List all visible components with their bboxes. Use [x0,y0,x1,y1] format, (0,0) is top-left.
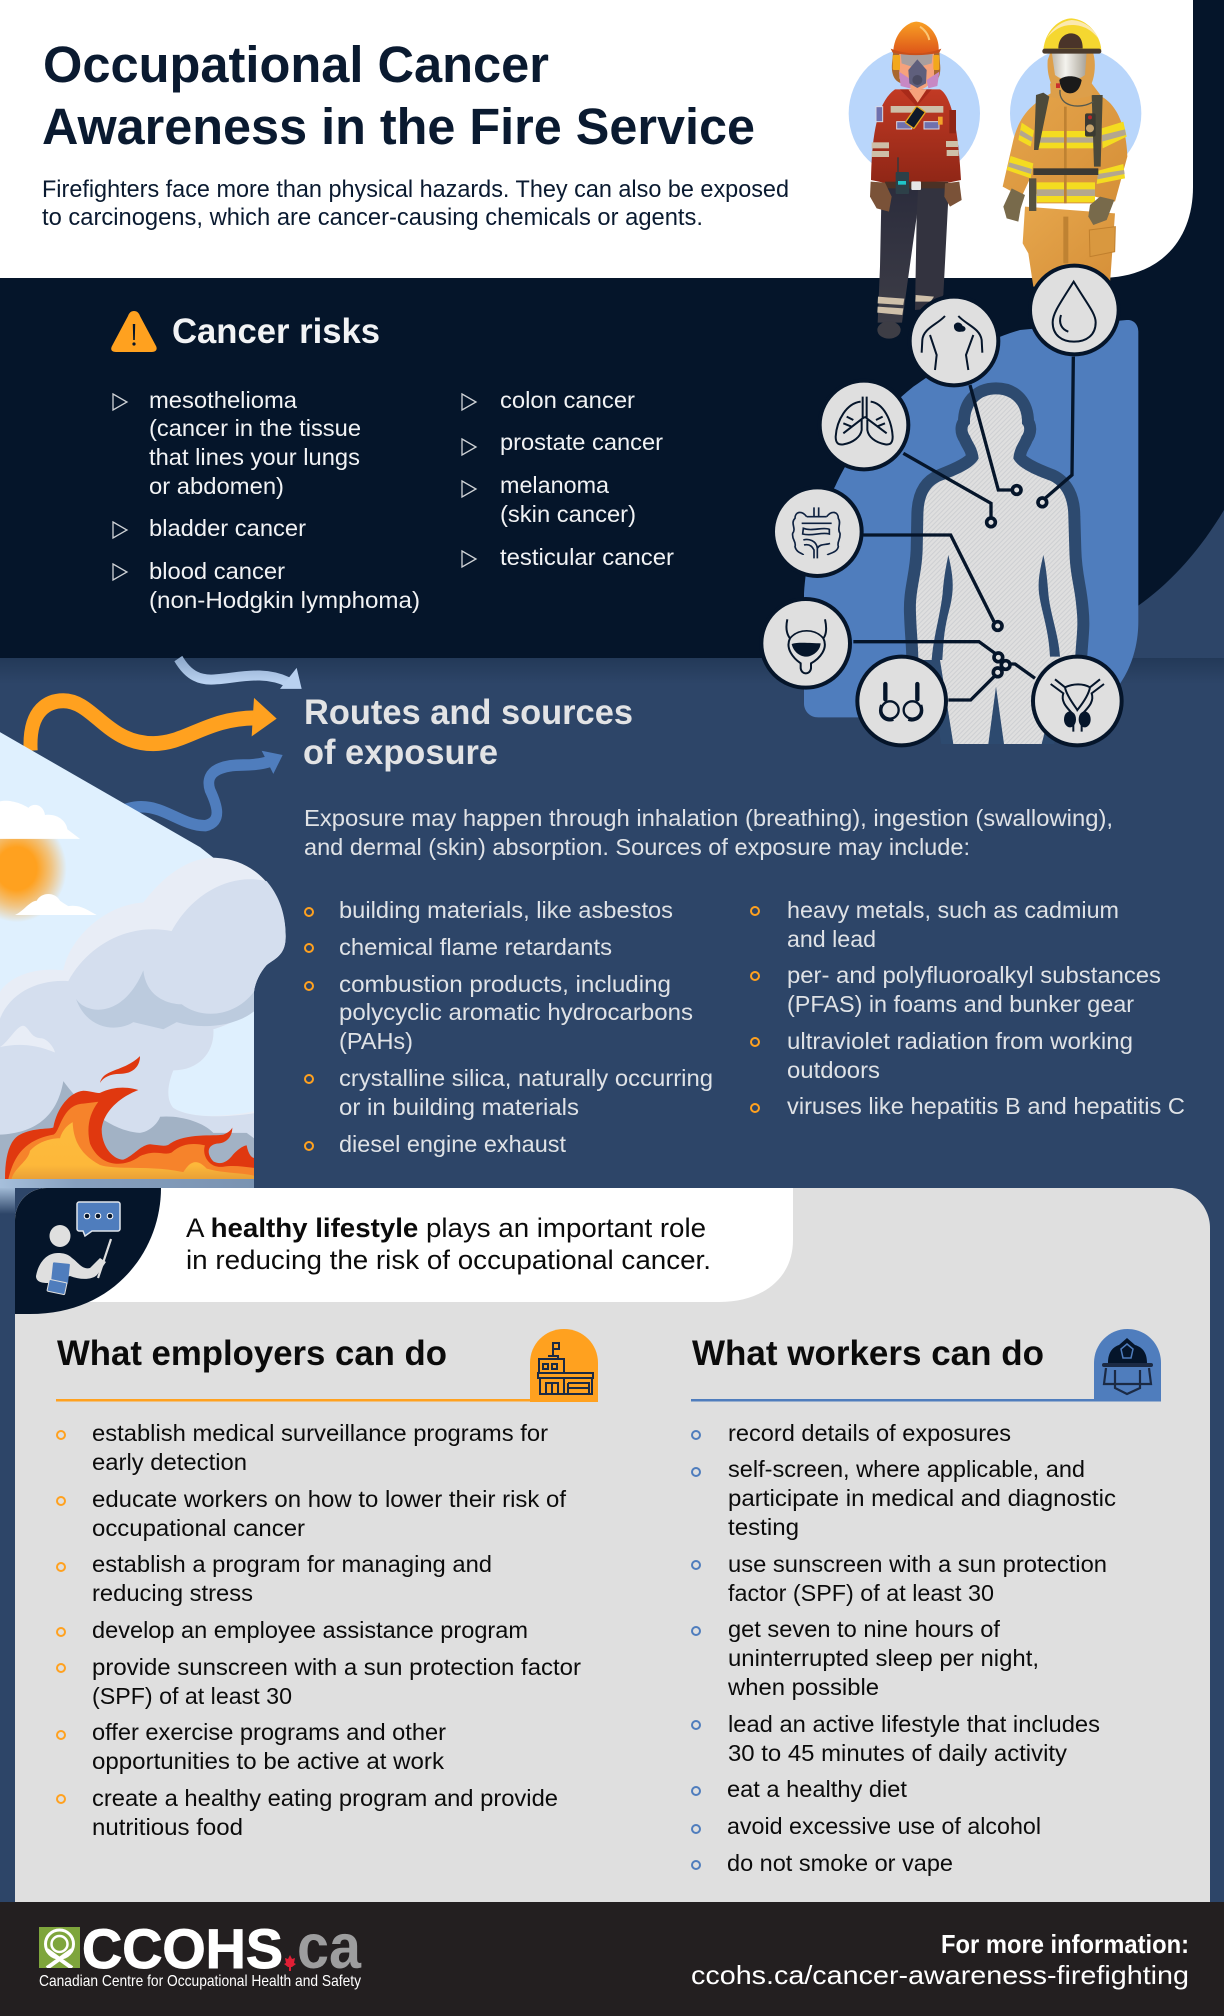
item [692,1711,1100,1766]
arrow: orange [30,698,277,751]
item: outdoors [787,1057,880,1083]
item [57,1551,492,1606]
item: diesel engine exhaust [339,1131,567,1157]
footer: more information [691,1929,1189,1990]
list: cancer risks right column [462,387,674,570]
heading: what employers can do: What employers can do [57,1334,447,1373]
panel: footer [0,1902,1224,2016]
item [57,1719,446,1774]
item: colon cancer: colon cancer [500,387,635,413]
heading: routes and sources [303,693,633,772]
icon: presenter badge [15,1188,161,1314]
item: eat a healthy diet [727,1776,908,1802]
icon: logo emblem [39,1927,80,1968]
item: building materials, like asbestos [339,897,673,923]
icon: maple leaf [284,1955,296,1971]
item: self-screen, where applicable, and [728,1456,1085,1482]
item: participate in medical and diagnostic [728,1485,1116,1511]
sky [0,732,254,1179]
speech bubble [77,1202,120,1236]
logo: CCOHS.ca: ca [297,1912,362,1982]
item: or in building materials [339,1094,579,1120]
item: factor (SPF) of at least 30 [728,1580,994,1606]
item: (PFAS) in foams and bunker gear [787,991,1134,1017]
text: exposure description [304,805,1113,860]
sun [0,811,87,926]
item [692,1616,1039,1700]
item: develop an employee assistance program [92,1617,528,1643]
list: what workers can do [692,1420,1116,1876]
arrow: blue [120,751,283,826]
item: heavy metals, such as cadmium [787,897,1119,923]
item: do not smoke or vape [727,1850,953,1876]
flames [5,1056,254,1179]
item: ultraviolet radiation from working [787,1028,1133,1054]
item: combustion products, including [339,971,671,997]
heading: cancer risks: Cancer risks [172,312,380,351]
item: polycyclic aromatic hydrocarbons [339,999,693,1025]
item [751,1028,1133,1083]
title: Awareness in the Fire Service [42,98,755,155]
item [57,1420,548,1475]
item: per- and polyfluoroalkyl substances [787,962,1161,988]
rule: workers heading line [691,1399,1161,1402]
background: shadow beneath navy band [0,658,1224,684]
item [57,1486,567,1541]
background: routes section [0,640,1224,1200]
item: establish medical surveillance programs for [92,1420,548,1446]
item [751,897,1119,952]
footer: more information: ccohs.ca/cancer-awareness-firefighting [691,1960,1189,1990]
item: occupational cancer [92,1515,305,1541]
item [305,1065,713,1120]
icon: testes [857,657,946,745]
icon: warning triangle [111,311,157,352]
item: when possible [727,1674,879,1700]
item: testing [728,1514,799,1540]
item: uninterrupted sleep per night, [728,1645,1039,1671]
item: mesothelioma [113,387,361,499]
item [751,962,1161,1017]
connector end rings [987,486,1047,677]
item: avoid excessive use of alcohol [727,1813,1041,1839]
text: exposure description: Exposure may happen through inhalation (breathing), ingestion (swallowing), [304,805,1113,831]
icon: bladder [761,599,850,688]
item [305,971,693,1054]
item: (PAHs) [339,1028,413,1054]
item: get seven to nine hours of [728,1616,1001,1642]
list: cancer risks left column [113,387,420,613]
item [57,1654,581,1709]
panel: cancer risks navy band [0,0,1224,658]
item: opportunities to be active at work [92,1748,445,1774]
item: mesothelioma: that lines your lungs [149,444,360,470]
illustration: two firefighters [849,18,1141,339]
item: blood cancer: blood cancer [149,558,285,584]
item: melanoma: melanoma [500,472,609,498]
intro text [42,176,789,231]
icon: fire station on orange arch [530,1329,598,1402]
item: provide sunscreen with a sun protection factor [92,1654,581,1680]
left edge fade beside panel [0,1188,15,1214]
panel: white healthy lifestyle banner [15,1188,793,1302]
list: what employers can do [57,1420,581,1840]
item: blood cancer: (non-Hodgkin lymphoma) [149,587,420,613]
list: exposure sources right column [751,897,1185,1119]
icon: prostate [1033,657,1122,745]
icon: firefighter helmet on blue arch [1094,1329,1161,1401]
item: bladder cancer: bladder cancer [149,515,306,541]
item: prostate cancer: prostate cancer [500,429,663,455]
illustration: arrows, sky, clouds and fire [0,659,302,1179]
icon: intestines [773,487,862,576]
item: mesothelioma: mesothelioma [149,387,297,413]
item: offer exercise programs and other [92,1719,446,1745]
intro text: Firefighters face more than physical hazards. They can also be exposed [42,176,789,203]
footer: more information: For more information: [941,1929,1189,1959]
presenter figure [36,1225,111,1295]
item: viruses like hepatitis B and hepatitis C [787,1093,1185,1119]
item: blood cancer [113,558,420,613]
item: mesothelioma: (cancer in the tissue [149,415,361,441]
item: melanoma: (skin cancer) [500,501,636,527]
item: record details of exposures [728,1420,1011,1446]
text: healthy lifestyle statement [186,1213,711,1275]
intro text: to carcinogens, which are cancer-causing chemicals or agents. [42,204,703,231]
text: healthy lifestyle statement: in reducing the risk of occupational cancer. [186,1245,711,1275]
blue circle backdrops [849,48,1141,179]
icon: blood drop [1030,266,1119,354]
title: Occupational Cancer [43,36,549,93]
item [692,1456,1116,1540]
item: crystalline silica, naturally occurring [339,1065,713,1091]
logo: CCOHS.ca [39,1927,362,1990]
item: and lead [787,926,876,952]
item: (SPF) of at least 30 [92,1683,292,1709]
illustration base strip [0,1179,254,1188]
item: create a healthy eating program and provide [92,1785,558,1811]
item: educate workers on how to lower their risk of [92,1486,567,1512]
title [42,36,755,155]
item: chemical flame retardants [339,934,612,960]
human body silhouette [916,394,1077,744]
clouds: small white [0,801,97,915]
icon: lungs [820,381,908,469]
heading: routes and sources: Routes and sources [304,693,633,732]
connector lines [853,357,1073,700]
rule: employers heading line [56,1399,598,1402]
panel: white title header [0,0,1193,278]
logo: CCOHS.ca: CCOHS [82,1917,283,1980]
item: establish a program for managing and [92,1551,492,1577]
item [57,1785,558,1840]
item: nutritious food [92,1814,243,1840]
arrow: light blue [178,659,302,689]
text: exposure description: and dermal (skin) absorption. Sources of exposure may include: [304,834,970,860]
heading: what workers can do: What workers can do [692,1334,1044,1373]
firefighter in red jacket and respirator [870,22,962,339]
text: healthy lifestyle statement: A healthy lifestyle plays an important role [186,1213,706,1243]
item [692,1551,1107,1606]
item: reducing stress [92,1580,253,1606]
icon: torso with melanoma [910,297,998,385]
item: use sunscreen with a sun protection [728,1551,1107,1577]
item: lead an active lifestyle that includes [728,1711,1100,1737]
smoke cloud [0,858,286,1179]
diagram: blue background shape [761,266,1138,745]
panel: grey actions panel [15,1188,1210,1902]
item: 30 to 45 minutes of daily activity [728,1740,1068,1766]
list: exposure sources left column [305,897,713,1157]
logo: CCOHS.ca: Canadian Centre for Occupational Health and Safety [39,1973,361,1990]
item: melanoma [462,472,636,527]
item: testicular cancer: testicular cancer [500,544,674,570]
item: mesothelioma: or abdomen) [149,473,284,499]
item: early detection [92,1449,247,1475]
heading: routes and sources: of exposure [303,733,498,772]
firefighter in turnout gear [1003,18,1127,287]
